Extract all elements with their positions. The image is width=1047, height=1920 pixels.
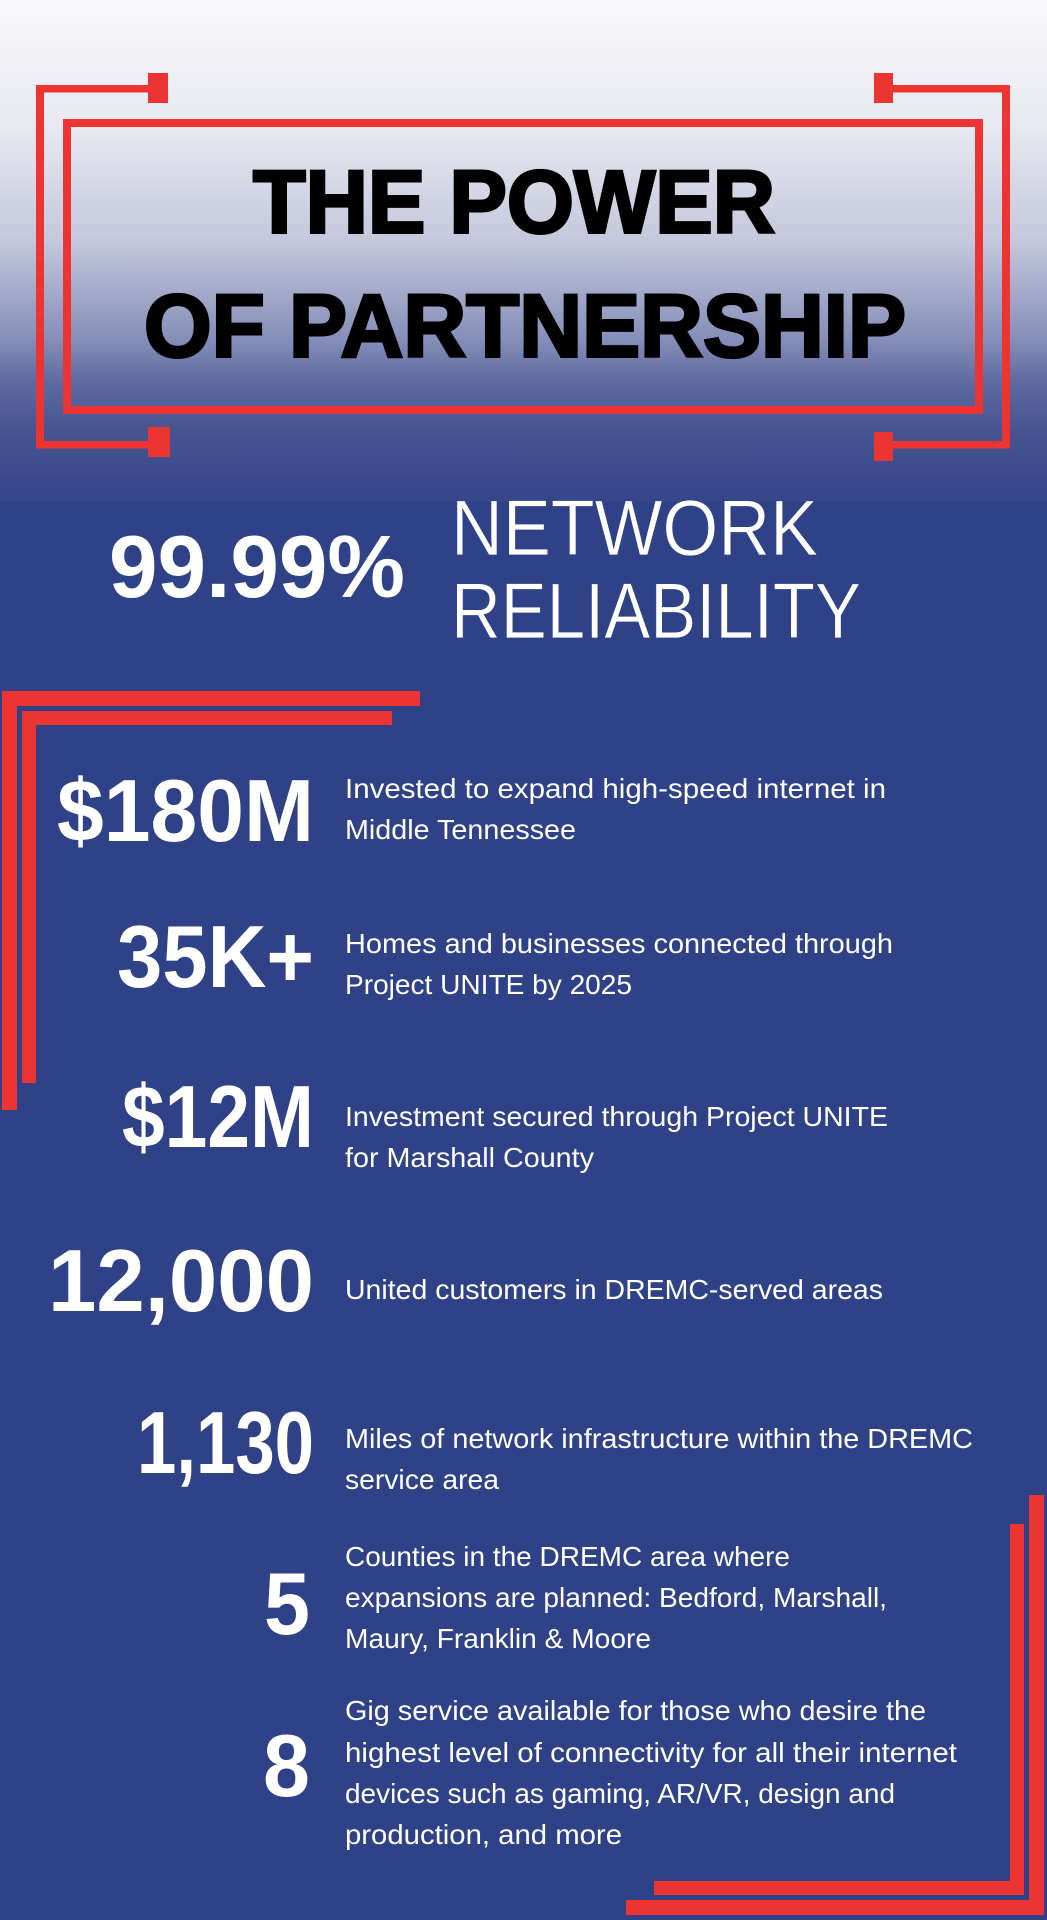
stat: 5: expansions are planned: Bedford, Marshall, (345, 1582, 887, 1613)
title (144, 152, 906, 376)
stat: 1,130: service area (345, 1464, 500, 1495)
stat: 12,000: 12,000 (48, 1231, 314, 1330)
stat: 5 (264, 1541, 887, 1654)
stat: 5: Maury, Franklin & Moore (345, 1623, 651, 1654)
stat: $180M: Middle Tennessee (345, 814, 576, 845)
header frame (36, 73, 1010, 461)
stat: $12M: Investment secured through Project UNITE (345, 1101, 888, 1132)
corner bars: bottom right (626, 1495, 1044, 1915)
stat: 35K+: 35K+ (117, 907, 314, 1006)
stat: 8: 8 (263, 1716, 310, 1815)
stat: 35K+: Project UNITE by 2025 (345, 969, 632, 1000)
inner title frame (67, 123, 979, 410)
title: OF PARTNERSHIP (144, 276, 906, 376)
stat: 35K+: Homes and businesses connected through (345, 928, 893, 959)
title: THE POWER (253, 152, 775, 252)
stat: 12,000: United customers in DREMC-served areas (345, 1274, 883, 1305)
background: top gradient (0, 0, 1047, 502)
stat: $12M (122, 1067, 888, 1173)
stat: 1,130: 1,130 (137, 1393, 314, 1492)
stat: 1,130 (137, 1393, 973, 1495)
outer bracket: left (36, 73, 170, 457)
stat: 99.99% network reliability: RELIABILITY (451, 566, 861, 655)
stat: 5: Counties in the DREMC area where (345, 1541, 790, 1572)
stat: $180M: $180M (57, 761, 314, 860)
stat: 8: devices such as gaming, AR/VR, design and (345, 1778, 895, 1809)
stat: 35K+ (117, 907, 893, 1006)
stat: 5: 5 (264, 1554, 310, 1653)
stat: 8: Gig service available for those who desire the (345, 1695, 926, 1726)
stat: 8: production, and more (345, 1819, 622, 1850)
stat: 8: highest level of connectivity for all their internet (345, 1737, 957, 1768)
stat: 8 (263, 1695, 957, 1850)
outer bracket: right (874, 73, 1010, 461)
stat: 99.99% network reliability: 99.99% (109, 517, 405, 616)
corner bars: top left (2, 691, 420, 1110)
stat: 1,130: Miles of network infrastructure within the DREMC (345, 1423, 973, 1454)
stat: $180M: Invested to expand high-speed internet in (345, 773, 886, 804)
stat: $180M (57, 761, 886, 860)
stat: 12,000 (48, 1231, 883, 1330)
stat: 99.99% network reliability: NETWORK (451, 483, 818, 572)
stat: $12M: $12M (122, 1067, 314, 1166)
stat: $12M: for Marshall County (345, 1142, 594, 1173)
stat: 99.99% network reliability (109, 483, 861, 655)
